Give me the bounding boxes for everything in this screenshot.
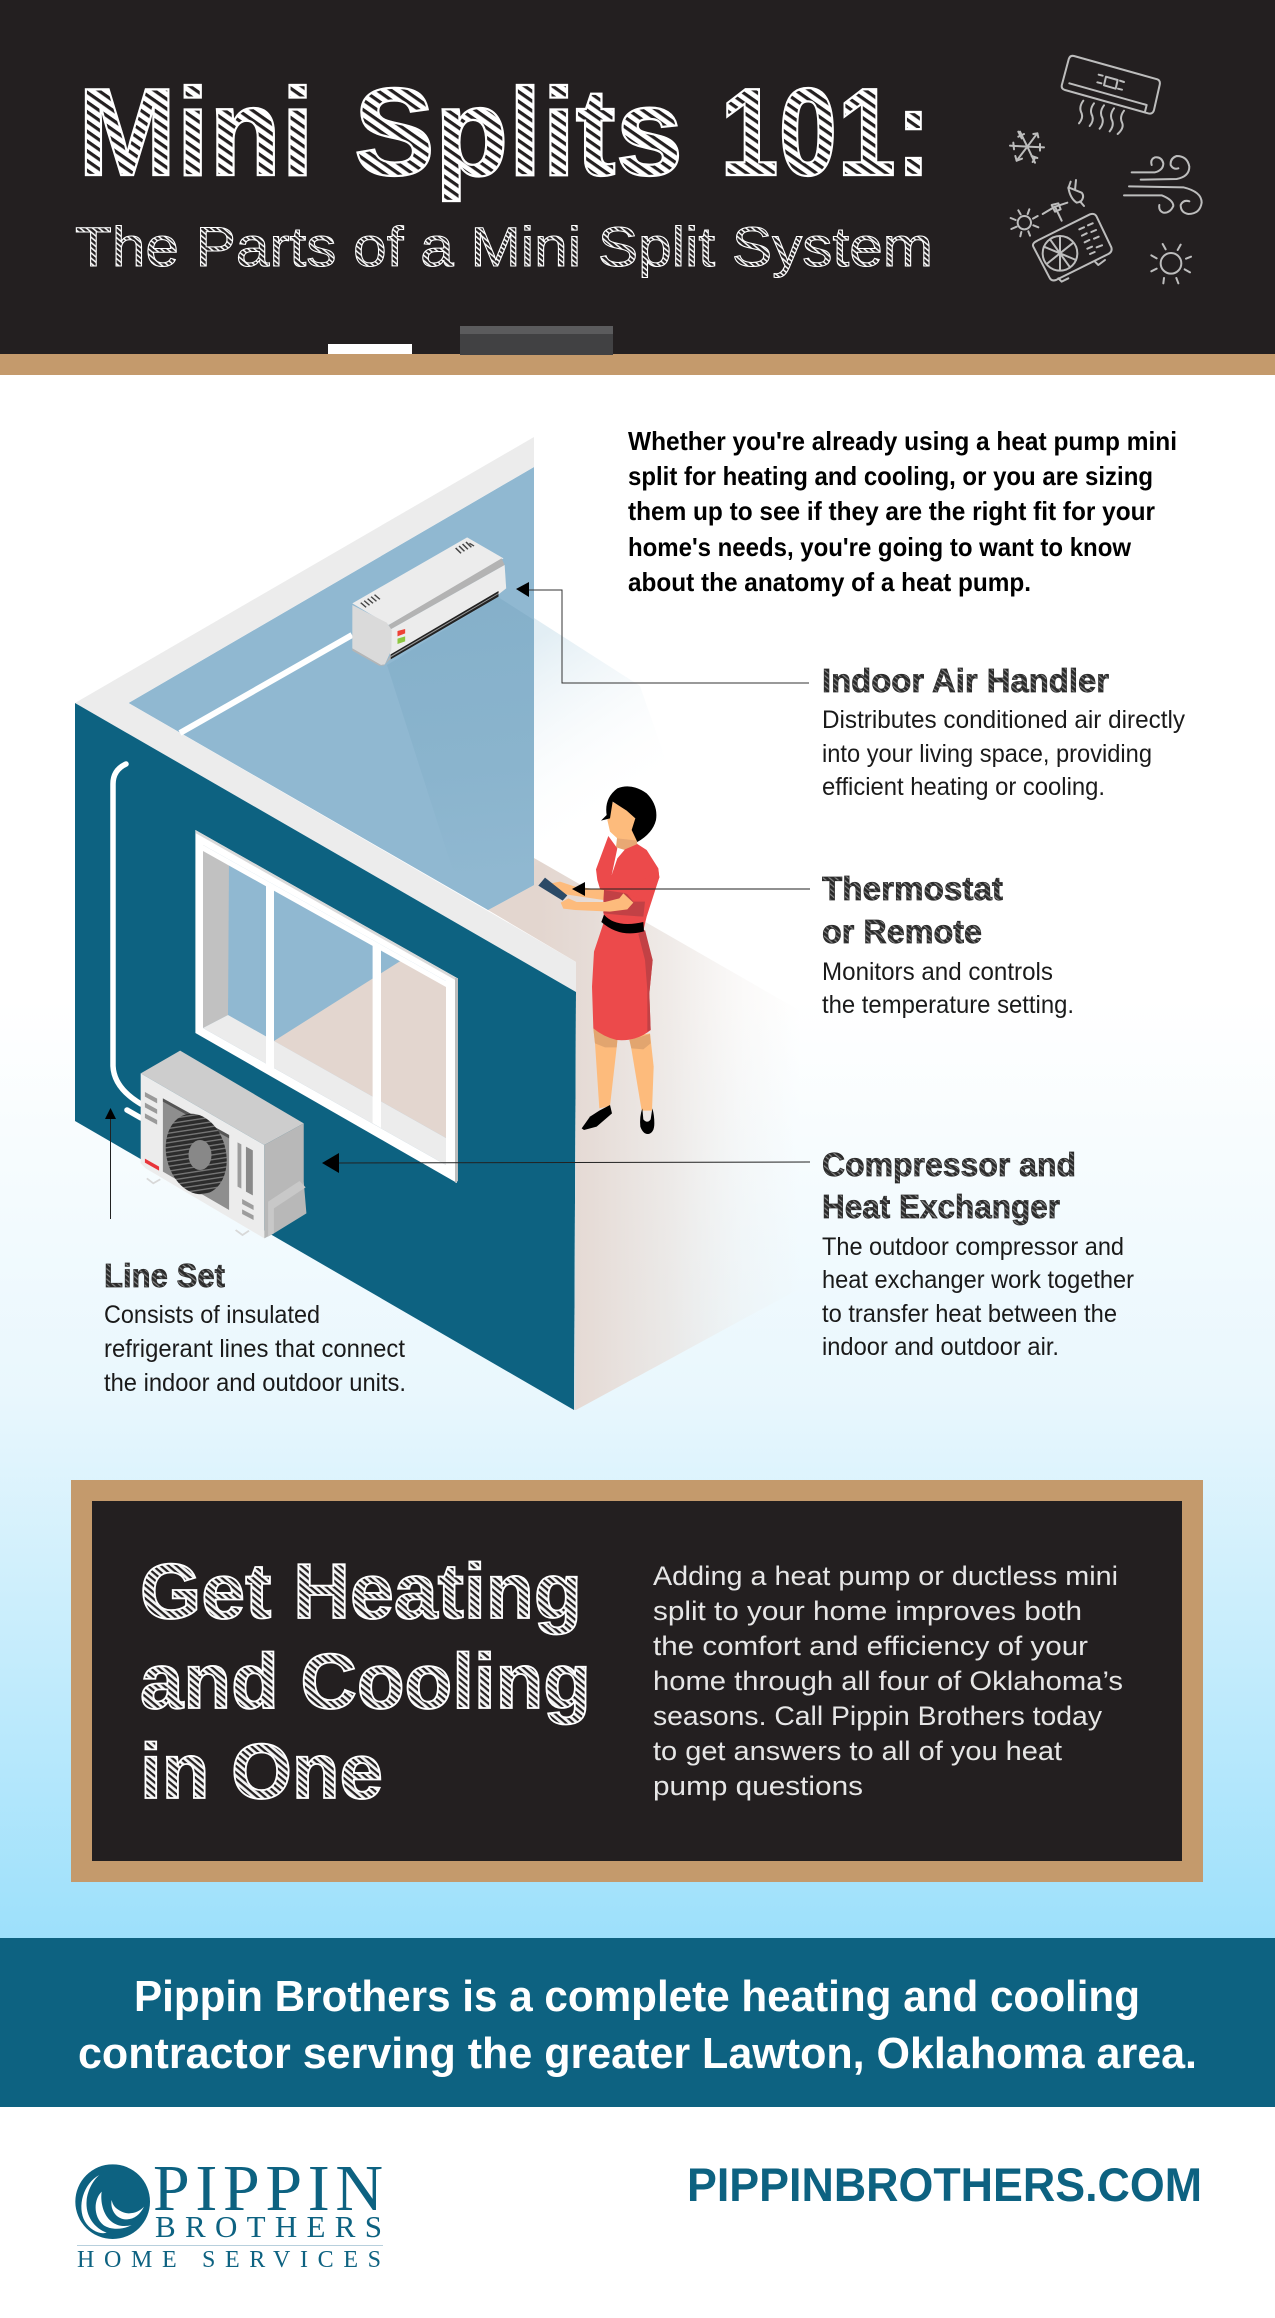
panel body text: seasons. Call Pippin Brothers today [653,1701,1103,1731]
heading: indoor air handler: Indoor Air Handler [822,662,1109,699]
icon: outdoor unit with plug [1033,180,1112,282]
description: line set [104,1301,406,1397]
refrigerant line inside [180,635,352,733]
description: compressor and heat exchanger: indoor and outdoor air. [822,1333,1059,1361]
belt [601,915,644,933]
heading: compressor and heat exchanger: Compressor and [822,1146,1076,1183]
leader line: line set [105,1108,116,1219]
outdoor line set pipe [113,764,141,1118]
outdoor compressor unit [141,1051,306,1238]
chalk tray [0,354,1275,375]
heading: thermostat or remote: Thermostat [822,870,1003,907]
subtitle: The Parts of a Mini Split System [75,215,933,278]
description: indoor air handler: into your living space, providing [822,740,1152,768]
icon: wind [1124,156,1202,214]
heading: line set: Line Set [104,1257,225,1294]
panel body text: to get answers to all of you heat [653,1736,1063,1766]
eraser [460,326,613,355]
description: compressor and heat exchanger: The outdoor compressor and [822,1233,1124,1261]
title [78,64,931,202]
panel body text: pump questions [653,1771,863,1801]
heading: thermostat or remote: or Remote [822,913,982,950]
description: indoor air handler: efficient heating or cooling. [822,773,1105,801]
website url: PIPPINBROTHERS.COM [687,2158,1202,2211]
panel heading: in One [140,1727,383,1815]
banner text: Pippin Brothers is a complete heating and cooling [134,1972,1140,2021]
logo: Pippin Brothers Home Services [75,2152,383,2273]
icon: small sun [1011,209,1038,236]
logo wordmark: BROTHERS [155,2209,382,2244]
wall top frame [75,437,576,992]
hair [601,786,656,842]
air flow glow outside room [534,618,690,900]
description: compressor and heat exchanger [822,1233,1134,1361]
intro paragraph: Whether you're already using a heat pump mini [628,426,1177,456]
label: indoor air handler [822,662,1185,801]
heading: compressor and heat exchanger [822,1146,1076,1225]
panel: get heating and cooling chalkboard [71,1480,1203,1882]
remote [538,878,567,901]
floor and right wall [488,858,830,1410]
icon: wall air conditioner [1062,56,1160,134]
banner: contractor statement [0,1938,1275,2107]
icon: sun [1151,244,1191,283]
front teal wall [75,703,576,1410]
window [195,830,458,1183]
heading: compressor and heat exchanger: Heat Exchanger [822,1188,1060,1225]
icon: snowflake [1010,132,1044,163]
dress shading [603,890,653,1032]
page background gradient [0,375,1275,1938]
intro paragraph: about the anatomy of a heat pump. [628,567,1031,597]
intro paragraph: them up to see if they are the right fit for your [628,496,1155,526]
panel heading [140,1547,591,1815]
description: thermostat or remote [822,958,1074,1019]
air flow cone [387,597,534,910]
right wall edge [574,992,576,1410]
header chalkboard panel [0,0,1275,375]
label: compressor and heat exchanger [822,1146,1134,1361]
description: indoor air handler: Distributes conditioned air directly [822,706,1185,734]
description: compressor and heat exchanger: heat exchanger work together [822,1266,1134,1294]
illustration: isometric room [75,437,830,1410]
heading: thermostat or remote [822,870,1003,950]
chalk stick [328,344,412,354]
arms [551,882,604,900]
description: thermostat or remote: the temperature setting. [822,991,1074,1019]
label: line set [104,1257,406,1397]
back wall [128,467,534,910]
title: Mini [78,64,314,202]
description: line set: the indoor and outdoor units. [104,1369,406,1397]
banner text: contractor serving the greater Lawton, Oklahoma area. [78,2029,1197,2078]
panel body text: home through all four of Oklahoma’s [653,1666,1123,1696]
intro paragraph: split for heating and cooling, or you are sizing [628,461,1153,491]
leader line: indoor air handler [516,582,809,683]
logo wordmark: HOME SERVICES [77,2247,381,2273]
chalk icons [1010,56,1202,283]
intro paragraph: home's needs, you're going to want to know [628,532,1132,562]
description: line set: refrigerant lines that connect [104,1335,405,1363]
logo wordmark: PIPPIN [153,2152,383,2225]
intro paragraph [628,426,1177,597]
label: thermostat or remote [822,870,1074,1019]
title: Splits [354,64,683,202]
panel body text: the comfort and efficiency of your [653,1631,1088,1661]
logo wordmark [77,2152,383,2273]
indoor air handler unit [352,537,506,666]
panel heading: Get Heating [140,1547,582,1635]
dress [592,836,659,1040]
banner text [78,1972,1197,2078]
panel body text: Adding a heat pump or ductless mini [653,1561,1118,1591]
title: 101: [720,64,931,202]
neck [616,835,637,850]
leader line: compressor [322,1153,810,1173]
description: indoor air handler [822,706,1185,801]
face [607,802,637,841]
panel body text [653,1561,1123,1801]
legs [582,1028,654,1134]
logo mark [75,2164,150,2239]
description: compressor and heat exchanger: to transfer heat between the [822,1300,1117,1328]
woman holding remote [538,786,659,1134]
description: thermostat or remote: Monitors and controls [822,958,1053,986]
panel heading: and Cooling [140,1637,591,1725]
sleeve [623,870,659,903]
panel body text: split to your home improves both [653,1596,1082,1626]
description: line set: Consists of insulated [104,1301,320,1329]
leader line: thermostat [572,882,810,896]
